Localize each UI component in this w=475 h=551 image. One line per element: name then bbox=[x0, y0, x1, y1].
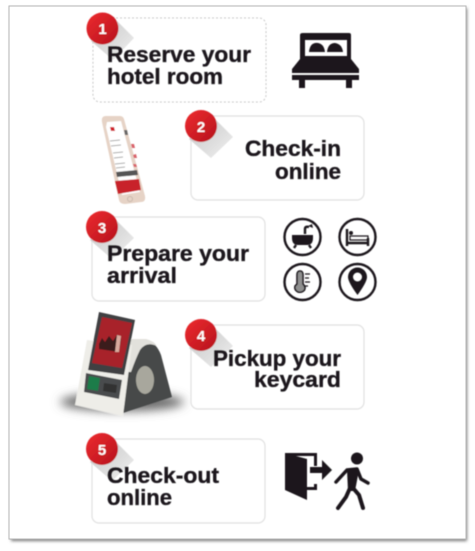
step 3 text: Prepare your bbox=[107, 241, 249, 266]
step 3 text bbox=[107, 241, 249, 288]
step 5: check-out online bbox=[86, 433, 265, 523]
icon: bathtub bbox=[284, 219, 320, 255]
step 2: check-in online bbox=[185, 110, 364, 200]
step 4 badge bbox=[185, 319, 233, 367]
step 3 badge: 3 bbox=[98, 220, 106, 237]
step 2 badge: 2 bbox=[197, 119, 205, 136]
step 2 badge bbox=[185, 110, 233, 158]
icon: bed bbox=[292, 33, 359, 88]
kiosk illustration bbox=[60, 312, 184, 416]
kiosk floor shadow bbox=[60, 393, 184, 411]
step 5 text: Check-out bbox=[107, 463, 220, 488]
step 2 card bbox=[191, 116, 364, 200]
step 1 badge bbox=[86, 12, 134, 60]
step 4 text bbox=[213, 346, 341, 392]
step 3 text: arrival bbox=[107, 263, 177, 288]
step 2 text: Check-in bbox=[245, 136, 341, 161]
kiosk rear housing bbox=[123, 340, 172, 413]
icon: thermometer bbox=[284, 264, 320, 300]
step 4: pickup keycard bbox=[185, 319, 364, 409]
step 5 badge: 5 bbox=[98, 442, 106, 459]
step 5 badge bbox=[86, 433, 134, 481]
step 5 card bbox=[92, 439, 265, 523]
step 2 text bbox=[245, 136, 341, 184]
step 3 card bbox=[92, 217, 265, 301]
step 4 text: Pickup your bbox=[213, 346, 341, 371]
step 1: reserve hotel room bbox=[86, 12, 266, 102]
step 3: prepare your arrival bbox=[86, 211, 265, 301]
step 4 badge: 4 bbox=[197, 328, 206, 345]
kiosk screen bbox=[88, 312, 135, 375]
step 2 text: online bbox=[275, 159, 341, 184]
step 5 text bbox=[107, 463, 220, 510]
step 5 text: online bbox=[107, 485, 172, 510]
step 4 text: keycard bbox=[254, 367, 341, 392]
step 1 text: Reserve your bbox=[107, 42, 251, 67]
step 1 text: hotel room bbox=[107, 64, 223, 89]
icon: smartphone with app bbox=[102, 116, 145, 204]
step 3 badge bbox=[86, 211, 134, 259]
step 1 card bbox=[93, 18, 266, 102]
kiosk front panel bbox=[75, 340, 132, 416]
step 1 badge: 1 bbox=[98, 21, 107, 38]
step 4 card bbox=[191, 325, 364, 409]
step 1 text bbox=[107, 42, 251, 89]
icon: map pin bbox=[340, 264, 376, 300]
icon: exit door with walking person bbox=[285, 452, 368, 508]
icon: hotel bed bbox=[340, 219, 376, 255]
